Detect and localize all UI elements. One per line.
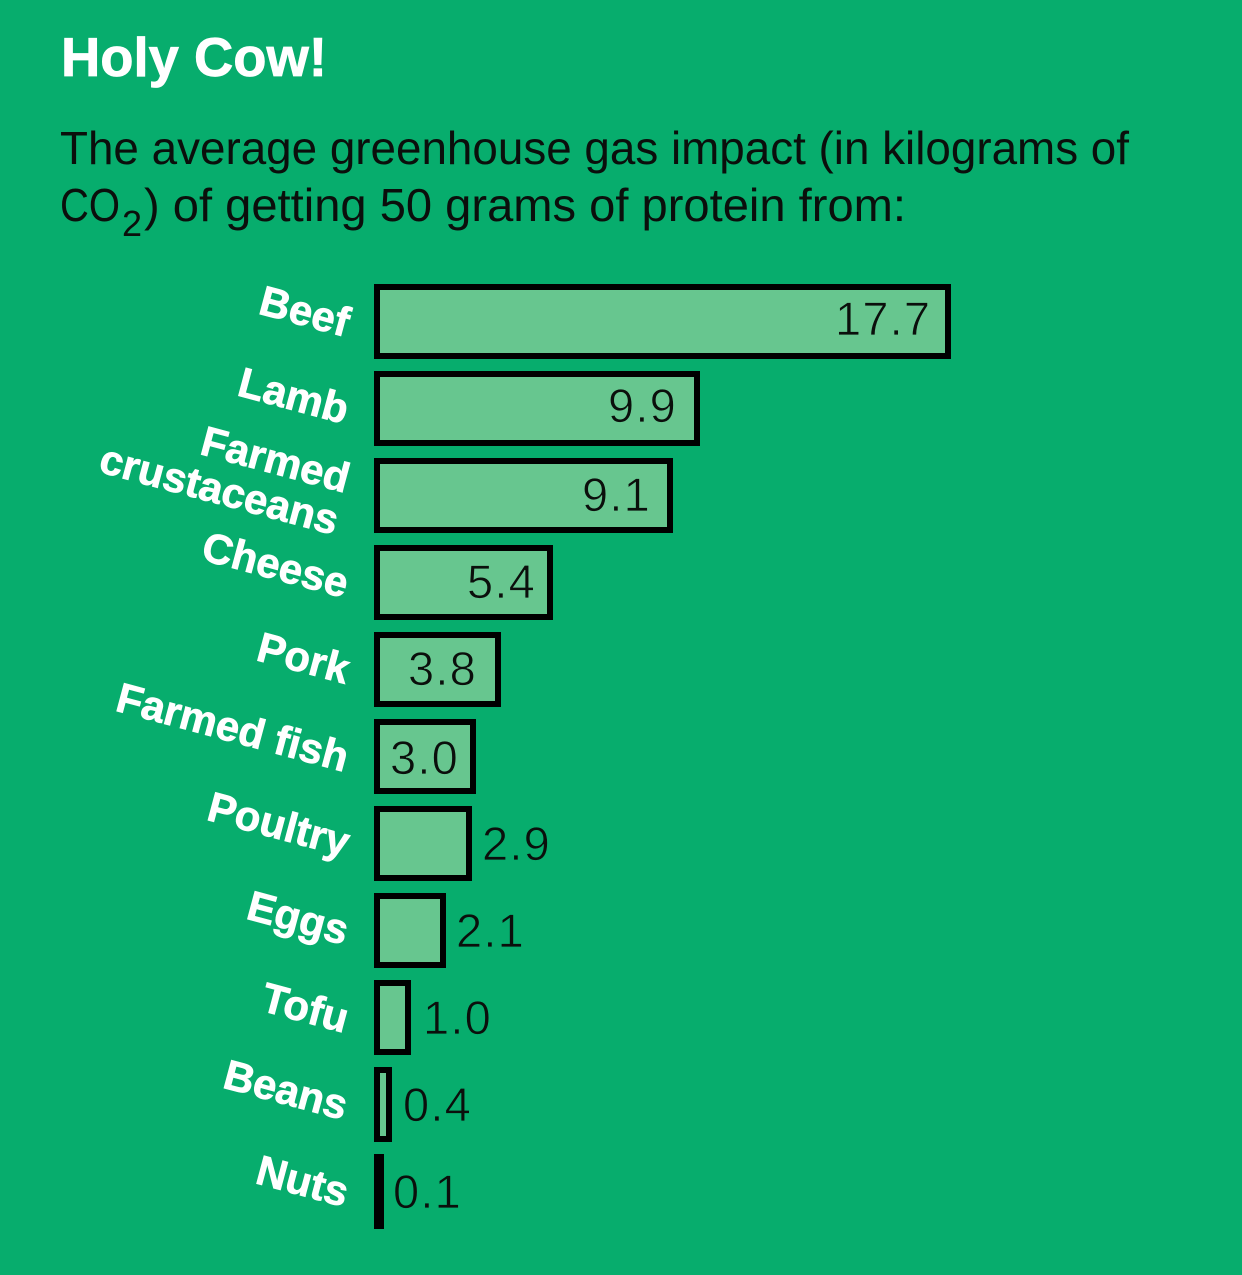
row: Beans: Beans (219, 1051, 353, 1129)
row: Lamb (233, 358, 697, 443)
row: Beans (219, 1051, 472, 1139)
subtitle text: CO (60, 179, 120, 231)
row: Beef (255, 277, 948, 356)
row: Pork: 3.8 (408, 642, 477, 695)
row: Beef: 17.7 (835, 292, 931, 345)
row: Poultry: Poultry (203, 783, 355, 866)
row: Nuts (252, 1146, 462, 1229)
row: Cheese: 5.4 (467, 555, 536, 608)
row: Farmed crustaceans: 9.1 (582, 468, 651, 521)
row: Cheese (197, 523, 550, 617)
row: Farmed crustaceans: Farmed (196, 417, 355, 502)
row: Cheese: Cheese (197, 523, 354, 607)
row: Eggs: Eggs (242, 882, 354, 954)
subtitle text: The average greenhouse gas impact (in kilograms of (60, 122, 1129, 174)
title: Holy Cow! (61, 26, 327, 88)
row: Pork: Pork (252, 623, 355, 693)
row: Poultry: 2.9 (482, 817, 551, 870)
row: Farmed crustaceans: crustaceans (95, 435, 344, 544)
row: Farmed fish (112, 674, 473, 791)
row: Eggs: 2.1 (456, 904, 525, 957)
bar chart (95, 277, 948, 1229)
subtitle text: 2 (122, 203, 142, 244)
row: Tofu: Tofu (257, 974, 354, 1042)
row: Beef: Beef (255, 277, 356, 346)
row: Lamb: Lamb (233, 358, 354, 433)
row: Beans: 0.4 (403, 1078, 472, 1131)
row: Farmed crustaceans (95, 417, 670, 544)
row: Farmed fish: 3.0 (390, 731, 459, 784)
row: Farmed fish: Farmed fish (112, 674, 354, 781)
row: Poultry (203, 783, 551, 878)
row: Pork (252, 623, 498, 704)
row: Nuts: 0.1 (393, 1165, 462, 1218)
row: Eggs (242, 882, 525, 965)
row: Nuts: Nuts (252, 1146, 354, 1216)
row: Tofu: 1.0 (423, 991, 492, 1044)
row: Tofu (257, 974, 492, 1052)
row: Lamb: 9.9 (608, 379, 677, 432)
subtitle text: ) of getting 50 grams of protein from: (144, 179, 906, 231)
subtitle text (60, 122, 1129, 244)
